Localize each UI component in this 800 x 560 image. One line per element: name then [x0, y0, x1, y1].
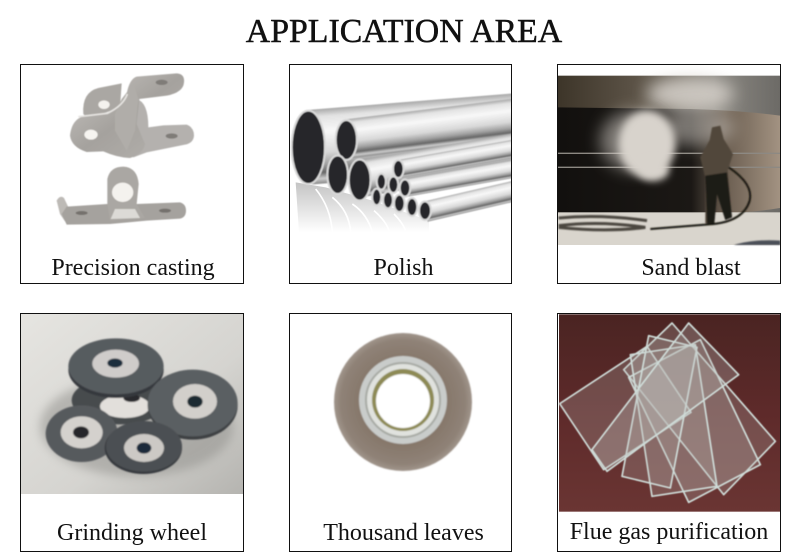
caption: Polish	[373, 255, 434, 281]
caption: Precision casting	[51, 255, 215, 281]
image: steel tubes	[290, 93, 511, 226]
title: APPLICATION AREA	[246, 12, 562, 50]
panel: polish	[289, 64, 512, 284]
caption: Sand blast	[641, 255, 741, 281]
panel: flue gas purification	[557, 313, 781, 552]
panel: sand blast	[557, 64, 781, 284]
caption: Flue gas purification	[570, 519, 768, 545]
image: glass plates on wood	[558, 314, 780, 512]
panel: precision casting	[20, 64, 244, 284]
image: flap wheel	[333, 332, 473, 472]
panel: thousand leaves	[289, 313, 512, 552]
image: cast metal parts	[56, 72, 194, 226]
panel: grinding wheel	[20, 313, 244, 552]
caption: Thousand leaves	[323, 520, 484, 546]
image: sand blasting worker	[558, 70, 780, 246]
reflection on the floor	[295, 182, 428, 232]
caption: Grinding wheel	[57, 520, 207, 546]
image: grinding wheels	[21, 314, 243, 494]
